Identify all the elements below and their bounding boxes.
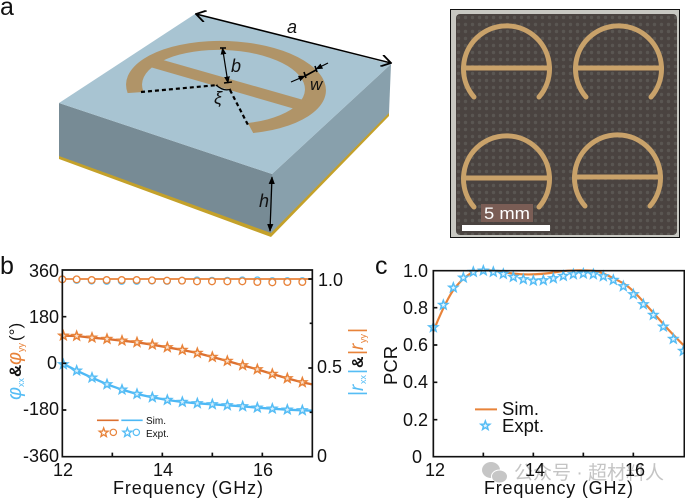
x axis title: Frequency (GHz)	[484, 478, 633, 498]
x axis title: Frequency (GHz)	[113, 478, 263, 498]
label: panel b: b	[0, 252, 14, 280]
experimental stars	[429, 266, 685, 355]
substrate top face	[59, 14, 391, 174]
dimension b	[220, 48, 232, 83]
blue amplitude circles	[59, 276, 306, 284]
label h: h	[259, 191, 269, 211]
dimension w	[291, 63, 328, 82]
x axis ticks: 16	[625, 460, 645, 480]
right axis title	[346, 328, 368, 396]
metal bar	[150, 60, 307, 109]
plotted series	[59, 270, 312, 457]
legend labels: Sim.	[146, 416, 166, 427]
legend symbols	[475, 409, 497, 429]
x axis ticks	[53, 460, 273, 480]
watermark text: 公众号 · 超材料人	[514, 462, 664, 484]
board	[456, 14, 677, 235]
y axis ticks: 0.8	[403, 298, 428, 318]
left axis ticks	[23, 261, 59, 466]
right axis title: |	[346, 391, 368, 396]
label a: a	[287, 17, 297, 37]
watermark	[482, 462, 664, 484]
right axis title: r	[347, 343, 368, 350]
x axis ticks	[425, 460, 645, 480]
left axis title: φ	[4, 352, 26, 365]
right axis title: r	[347, 384, 368, 391]
x axis ticks: 12	[425, 460, 445, 480]
photo frame	[450, 10, 680, 238]
y axis ticks	[403, 261, 428, 467]
right axis title: |	[346, 350, 368, 355]
panel b: phase and amplitude chart	[4, 261, 368, 498]
left axis ticks: 360	[29, 261, 59, 281]
right axis ticks	[317, 270, 343, 466]
blue phase curve	[62, 363, 312, 411]
legend symbols	[97, 420, 143, 436]
label: panel c: c	[375, 252, 388, 280]
axes box	[62, 270, 312, 457]
label w: w	[310, 75, 324, 94]
axes box	[433, 271, 684, 457]
panel a: sample photo	[450, 10, 680, 238]
right axis title: xx	[358, 374, 368, 384]
right axis title: |	[346, 369, 368, 374]
scale bar	[462, 225, 550, 231]
orange phase curve	[62, 336, 312, 384]
y axis ticks: 0.2	[403, 410, 428, 430]
x axis ticks: 16	[253, 460, 273, 480]
label b: b	[231, 56, 241, 76]
printed rings	[464, 26, 662, 207]
substrate left face	[59, 103, 272, 233]
right axis ticks: 0.5	[317, 357, 342, 377]
left axis ticks: 180	[29, 307, 59, 327]
y axis title: PCR	[380, 346, 401, 385]
panel a: sample photo: 5 mm	[484, 204, 530, 223]
y axis ticks: 0.4	[403, 372, 428, 392]
right axis ticks: 1.0	[318, 270, 343, 290]
left axis ticks: -360	[23, 446, 59, 466]
metal ground plate	[59, 112, 389, 237]
x axis ticks: 12	[53, 460, 73, 480]
angle lines	[141, 85, 248, 125]
dimension h	[270, 177, 272, 231]
y axis ticks: 0.6	[403, 335, 428, 355]
angle arc	[216, 85, 231, 90]
metal ring	[124, 38, 328, 137]
orange amplitude line	[62, 276, 312, 282]
panel c: PCR chart	[380, 261, 685, 498]
left axis title: φ	[4, 387, 26, 400]
substrate right face	[271, 64, 391, 233]
legend labels: Sim.	[502, 398, 539, 419]
right axis title: &	[350, 356, 367, 368]
left axis ticks: -180	[23, 399, 59, 419]
left axis title	[4, 323, 26, 400]
panel a: unit cell diagram	[59, 14, 391, 237]
orange phase stars	[59, 331, 307, 386]
plotted series	[429, 266, 685, 457]
label xi: ξ	[214, 88, 223, 108]
watermark icon	[482, 462, 508, 483]
panel b: phase and amplitude chart: Expt.	[146, 429, 169, 440]
x axis ticks: 14	[153, 460, 173, 480]
y axis ticks: 0	[412, 447, 422, 467]
left axis title: (°)	[6, 323, 25, 341]
blue phase stars	[59, 360, 307, 414]
left axis title: &	[6, 365, 25, 377]
orange amplitude circles	[59, 276, 306, 286]
scale label	[481, 204, 533, 222]
right axis title: yy	[358, 334, 368, 343]
simulated curve	[433, 270, 684, 346]
dimension a	[196, 14, 391, 63]
right axis title: |	[346, 328, 368, 333]
right axis ticks: 0	[317, 446, 327, 466]
left axis title: yy	[16, 342, 26, 352]
x axis ticks: 14	[525, 460, 545, 480]
left axis ticks: 0	[47, 353, 57, 373]
left axis title: xx	[16, 378, 26, 387]
panel c: PCR chart: Expt.	[502, 415, 544, 436]
y axis ticks: 1.0	[403, 261, 428, 281]
